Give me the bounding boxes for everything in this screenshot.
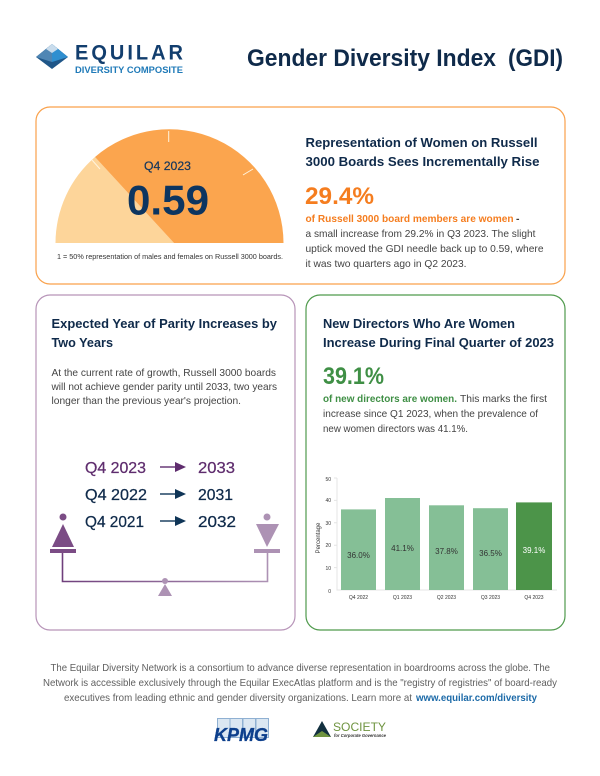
text block: new directors: increase since Q1 2023, when the prevalence of	[323, 408, 538, 420]
bar chart: new women directors by quarter: Percentage	[316, 522, 322, 553]
text block: representation detail: -	[516, 213, 520, 225]
bar chart: new women directors by quarter: 36.5%	[479, 549, 502, 558]
bar chart: new women directors by quarter: Q4 2023	[524, 595, 544, 601]
heading: representation of women: 3000 Boards Sees Incrementally Rise	[306, 154, 540, 169]
text block: parity: longer than the previous year's projection.	[52, 395, 241, 407]
heading: parity: Two Years	[52, 335, 113, 350]
text block: representation detail	[306, 213, 544, 270]
text block: representation detail: it was two quarters ago in Q2 2023.	[306, 258, 466, 270]
heading: parity	[52, 316, 278, 350]
logo: Equilar Diversity Composite: DIVERSITY COMPOSITE	[75, 65, 183, 76]
text block: parity: At the current rate of growth, Russell 3000 boards	[52, 367, 276, 379]
heading: representation of women: Representation of Women on Russell	[306, 135, 538, 150]
parity table: Q4 2021	[85, 514, 144, 531]
bar chart: new women directors by quarter: 41.1%	[391, 544, 414, 553]
bar chart: new women directors by quarter: 39.1%	[523, 546, 545, 555]
title: Gender Diversity Index	[247, 45, 497, 72]
logo: Society for Corporate Governance: SOCIETY	[333, 720, 386, 734]
text block: representation detail: uptick moved the GDI needle back up to 0.59, where	[306, 243, 544, 255]
bar chart: new women directors by quarter: Q2 2023	[437, 595, 456, 601]
logo: Equilar Diversity Composite	[36, 41, 183, 76]
bar chart: new women directors by quarter: 30	[325, 521, 331, 527]
icon: balance scale with gender symbols	[50, 514, 280, 596]
text block: representation detail: a small increase from 29.2% in Q3 2023. The slight	[306, 228, 536, 240]
text block: representation detail: of Russell 3000 board members are women	[306, 213, 514, 225]
stat: 39.1%: 39.1%	[323, 363, 384, 390]
heading: new directors: New Directors Who Are Women	[323, 316, 515, 331]
text block: new directors	[323, 393, 547, 435]
bar chart: new women directors by quarter: 10	[325, 566, 331, 572]
logo: Equilar Diversity Composite: EQUILAR	[75, 41, 183, 65]
parity table	[85, 460, 236, 531]
bar chart: new women directors by quarter: 37.8%	[435, 547, 458, 556]
text block: parity: will not achieve gender parity until 2033, two years	[51, 381, 277, 393]
heading: representation of women	[306, 135, 540, 169]
bar chart: new women directors by quarter: 50	[325, 477, 331, 483]
logo: Society for Corporate Governance: for Corporate Governance	[334, 733, 386, 738]
gauge chart: Q4 2023	[144, 159, 191, 173]
panel: new directors who are women	[306, 295, 565, 630]
panel: expected year of parity	[36, 295, 295, 630]
footer text: www.equilar.com/diversity	[415, 692, 537, 704]
heading: new directors	[323, 316, 554, 350]
heading: parity: Expected Year of Parity Increases by	[52, 316, 278, 331]
gauge chart	[56, 129, 284, 243]
bar chart: new women directors by quarter: Q4 2022	[349, 595, 368, 601]
parity table: 2033	[198, 460, 235, 477]
text block: new directors: This marks the first	[460, 393, 547, 405]
text block: new directors: of new directors are women.	[323, 393, 457, 405]
footer text: Network is accessible exclusively through the Equilar ExecAtlas platform and is the "registry of registries" of board-ready	[43, 677, 558, 689]
bar chart: new women directors by quarter: 20	[325, 543, 331, 549]
logo: Society for Corporate Governance	[313, 720, 386, 738]
title: (GDI)	[508, 45, 563, 72]
bar chart: new women directors by quarter: 0	[328, 589, 331, 595]
text block: parity	[51, 367, 277, 407]
gauge chart: 0.59	[127, 176, 209, 224]
footer text: The Equilar Diversity Network is a consortium to advance diverse representation in boardrooms across the globe. The	[50, 662, 550, 674]
gauge note: 1 = 50% representation of males and females on Russell 3000 boards.	[57, 252, 283, 261]
text block: new directors: new women directors was 41.1%.	[323, 423, 468, 435]
parity table: 2031	[198, 487, 233, 504]
footer text	[43, 662, 558, 704]
stat: 29.4%: 29.4%	[305, 183, 374, 210]
bar chart: new women directors by quarter	[316, 477, 557, 601]
bar chart: new women directors by quarter: Q1 2023	[393, 595, 412, 601]
logo: KPMG: KPMG	[214, 725, 268, 745]
bar chart: new women directors by quarter: Q3 2023	[481, 595, 500, 601]
panel: gauge and women on boards	[36, 107, 565, 284]
heading: new directors: Increase During Final Quarter of 2023	[323, 335, 554, 350]
parity table: Q4 2023	[85, 460, 146, 477]
bar chart: new women directors by quarter: 40	[325, 498, 331, 504]
footer text: executives from leading ethnic and gender diversity organizations. Learn more at	[64, 692, 412, 704]
bar chart: new women directors by quarter: 36.0%	[347, 551, 370, 560]
parity table: Q4 2022	[85, 487, 147, 504]
parity table: 2032	[198, 514, 236, 531]
